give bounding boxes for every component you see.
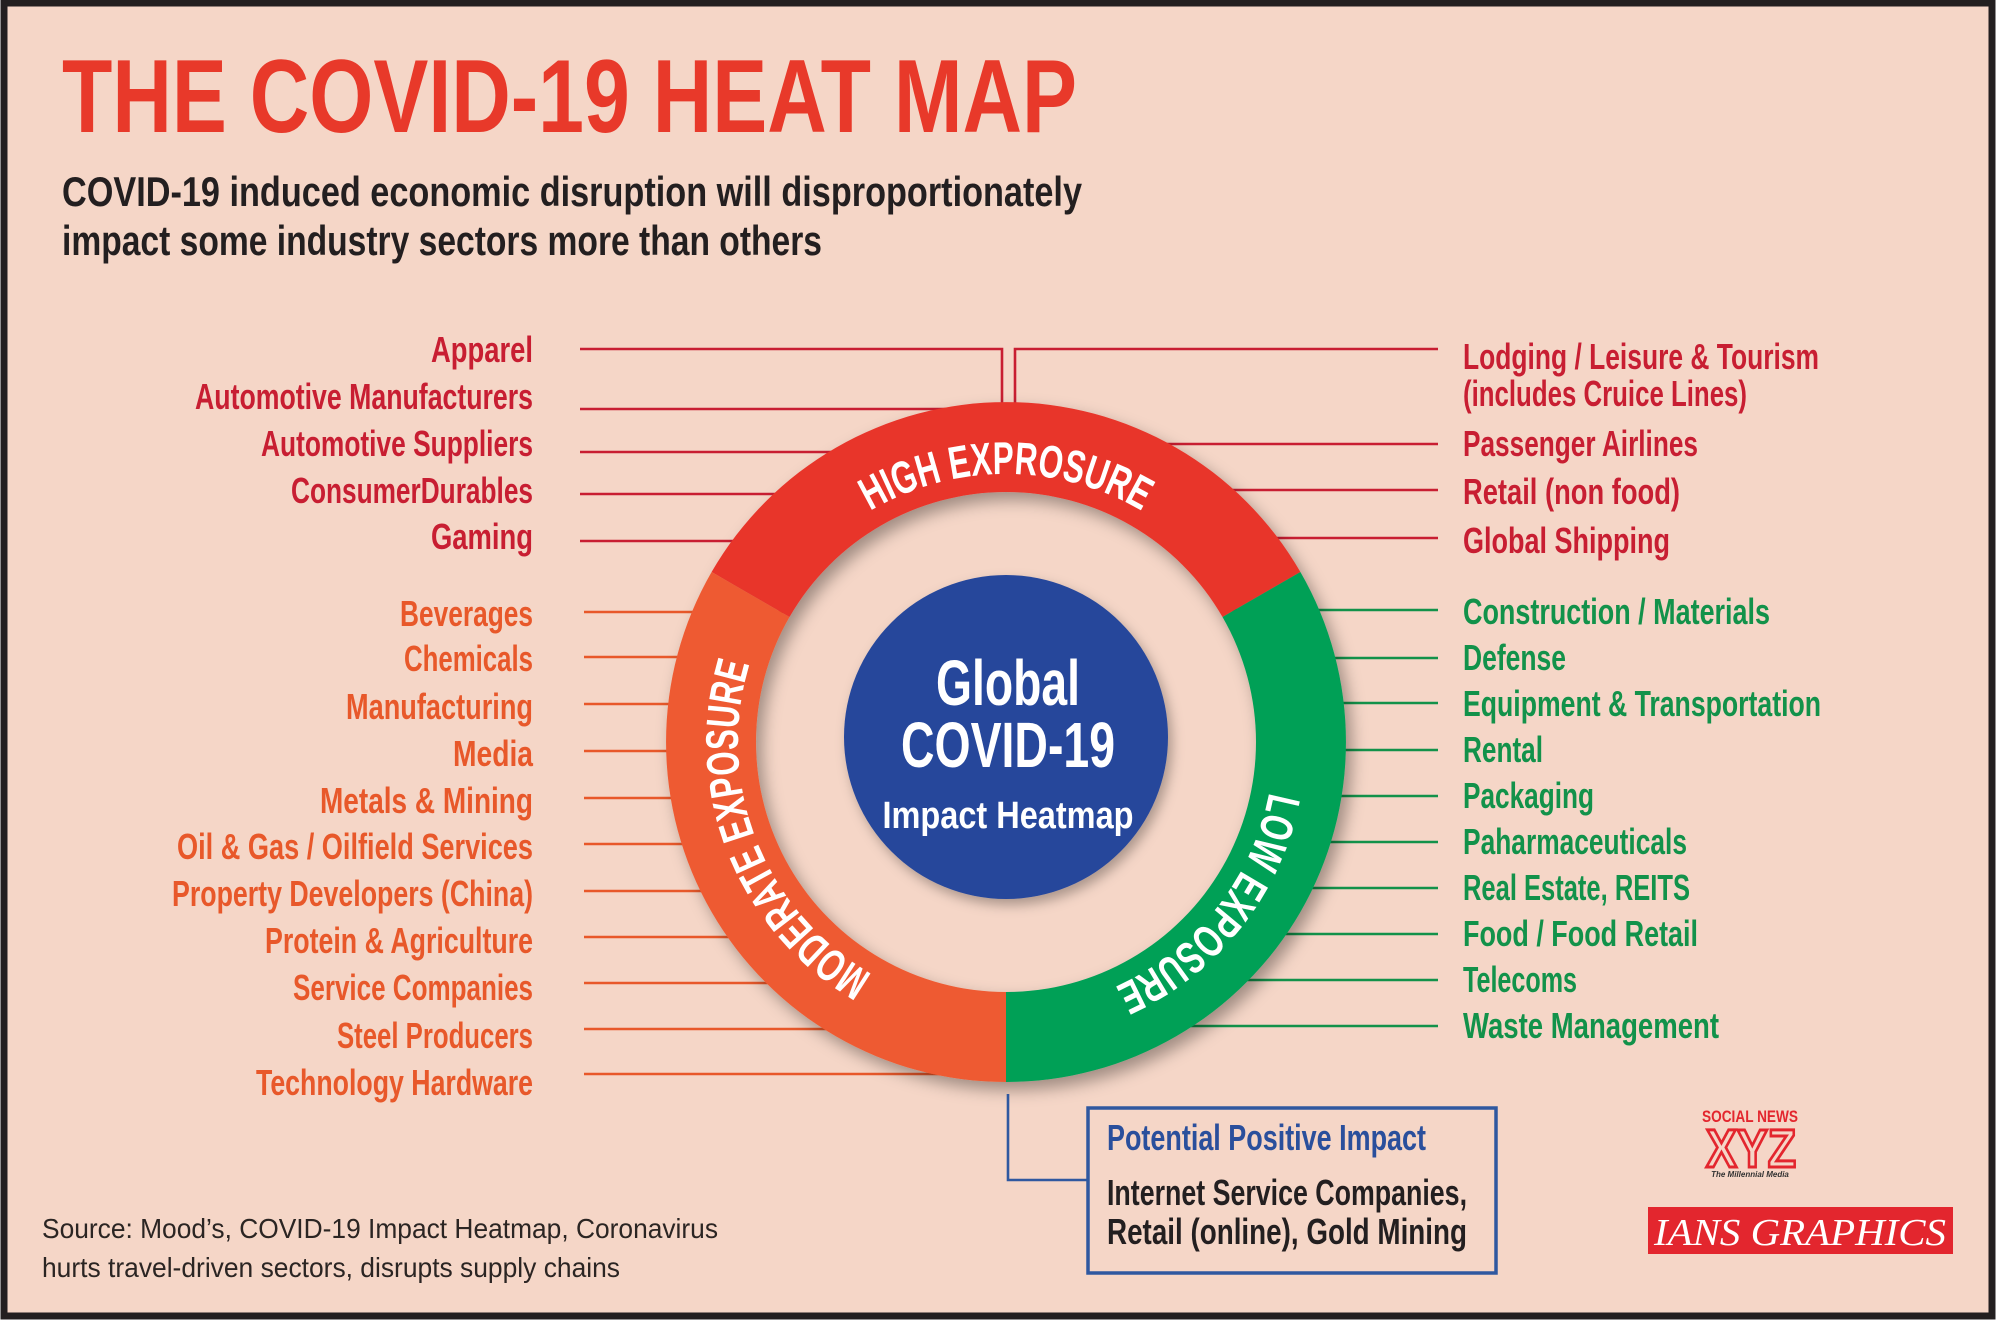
left labels: moderate exposure: Chemicals — [404, 638, 533, 679]
segment: moderate exposure — [666, 572, 1006, 1082]
subtitle: impact some industry sectors more than others — [62, 217, 822, 264]
logo: social news xyz: SOCIAL NEWS — [1702, 1107, 1798, 1126]
right labels: high exposure — [1463, 336, 1819, 561]
left labels: high exposure: Automotive Manufacturers — [195, 376, 533, 417]
right labels: low exposure: Equipment & Transportation — [1463, 683, 1821, 724]
ring labels: MODERATE EXPOSURE — [706, 658, 870, 1000]
left labels: high exposure — [195, 329, 533, 557]
right labels: low exposure: Defense — [1463, 637, 1566, 678]
logo: social news xyz: XYZ — [1706, 1119, 1796, 1179]
right labels: low exposure: Paharmaceuticals — [1463, 821, 1687, 862]
left labels: high exposure: Apparel — [431, 329, 533, 370]
positive impact box: Potential Positive Impact — [1107, 1117, 1426, 1158]
left labels: moderate exposure: Technology Hardware — [256, 1062, 533, 1103]
left labels: high exposure: Gaming — [431, 516, 533, 557]
segment: high exposure — [712, 402, 1300, 617]
left labels: moderate exposure: Beverages — [400, 593, 533, 634]
right labels: low exposure: Waste Management — [1463, 1005, 1719, 1046]
title: THE COVID-19 HEAT MAP — [62, 39, 1077, 155]
logo: social news xyz: The Millennial Media — [1711, 1170, 1789, 1179]
left labels: high exposure: Automotive Suppliers — [261, 423, 533, 464]
source note: hurts travel-driven sectors, disrupts supply chains — [42, 1252, 620, 1283]
right labels: high exposure: Passenger Airlines — [1463, 423, 1698, 464]
right labels: low exposure: Construction / Materials — [1463, 591, 1770, 632]
center circle: COVID-19 — [901, 709, 1115, 781]
right labels: low exposure: Food / Food Retail — [1463, 913, 1698, 954]
left labels: moderate exposure: Property Developers (China) — [172, 873, 533, 914]
ring labels: LOW EXPOSURE — [1116, 794, 1300, 1015]
right labels: high exposure: Lodging / Leisure & Tourism — [1463, 336, 1819, 377]
left labels: moderate exposure: Protein & Agriculture — [265, 920, 533, 961]
left labels: high exposure: ConsumerDurables — [291, 470, 533, 511]
positive impact box: Internet Service Companies, — [1107, 1172, 1467, 1213]
connector to positive impact box — [1008, 1094, 1087, 1180]
right labels: high exposure: Global Shipping — [1463, 520, 1670, 561]
ring labels: HIGH EXPROSURE — [857, 442, 1156, 510]
left labels: moderate exposure — [172, 593, 534, 1103]
logo: IANS graphics: IANS GRAPHICS — [1653, 1212, 1946, 1254]
positive impact box: Retail (online), Gold Mining — [1107, 1211, 1467, 1252]
left labels: moderate exposure: Manufacturing — [346, 686, 533, 727]
right labels: high exposure: (includes Cruice Lines) — [1463, 373, 1747, 414]
source note — [42, 1213, 718, 1283]
left labels: moderate exposure: Media — [453, 733, 534, 774]
subtitle — [62, 168, 1083, 264]
right labels: low exposure: Packaging — [1463, 775, 1594, 816]
left labels: moderate exposure: Steel Producers — [337, 1015, 533, 1056]
positive impact box — [1088, 1108, 1496, 1273]
center circle: Impact Heatmap — [882, 795, 1134, 837]
left labels: moderate exposure: Oil & Gas / Oilfield Services — [177, 826, 533, 867]
subtitle: COVID-19 induced economic disruption will disproportionately — [62, 168, 1083, 215]
right labels: low exposure: Rental — [1463, 729, 1543, 770]
center circle: Global — [936, 647, 1080, 719]
right labels: low exposure: Real Estate, REITS — [1463, 867, 1690, 908]
source note: Source: Mood’s, COVID-19 Impact Heatmap, Coronavirus — [42, 1213, 718, 1244]
center circle — [844, 575, 1168, 899]
right labels: low exposure: Telecoms — [1463, 959, 1577, 1000]
left labels: moderate exposure: Service Companies — [293, 967, 533, 1008]
exposure ring — [666, 402, 1346, 1082]
segment: low exposure — [1006, 572, 1346, 1082]
left labels: moderate exposure: Metals & Mining — [320, 780, 533, 821]
ring labels — [706, 442, 1300, 1015]
right labels: low exposure — [1463, 591, 1821, 1046]
right labels: high exposure: Retail (non food) — [1463, 471, 1680, 512]
connector lines — [580, 349, 1438, 1074]
